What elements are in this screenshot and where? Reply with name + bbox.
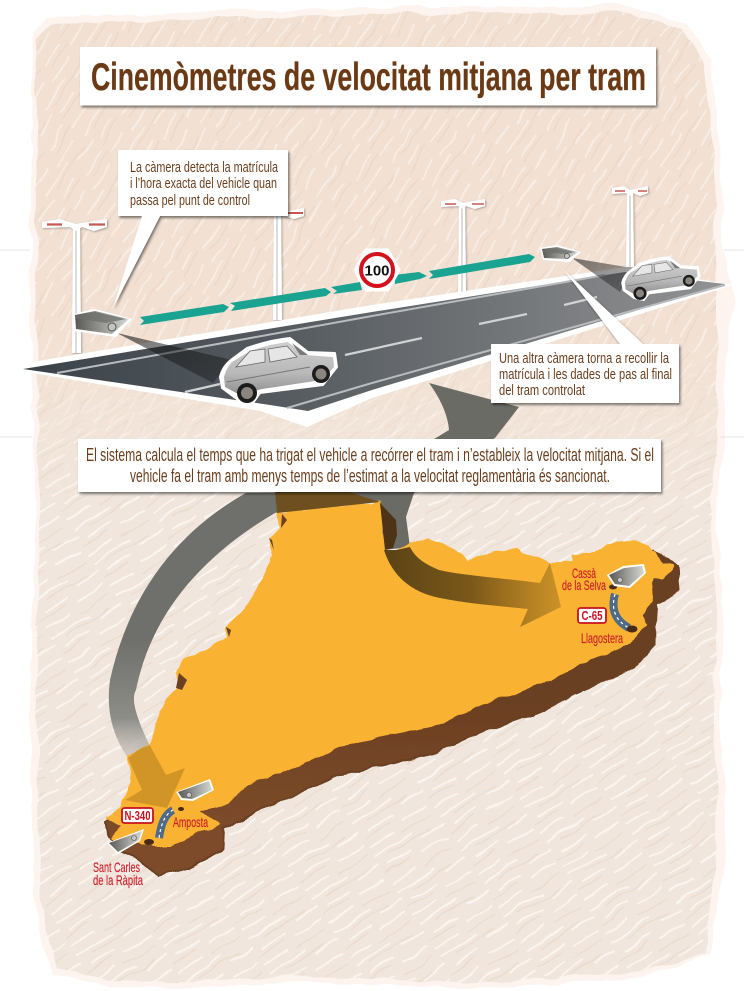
road white border — [8, 267, 733, 427]
camera 2 — [540, 245, 581, 262]
callout: first camera — [113, 150, 288, 308]
lamp post 2 — [273, 208, 304, 320]
arrow over map: south — [125, 742, 185, 808]
place labels: de la Ràpita — [93, 872, 143, 888]
camera light cone 2 — [572, 258, 632, 292]
place labels: Sant Carles — [93, 859, 140, 875]
lamp post 4 — [612, 186, 648, 267]
place labels: Llagostera — [581, 630, 623, 646]
map camera: Cassà — [607, 564, 646, 588]
callout: first camera: La càmera detecta la matrícula — [130, 159, 278, 176]
map notch wall — [380, 503, 397, 550]
car wheels — [237, 365, 330, 403]
camera light cone 1 — [117, 333, 232, 383]
map camera: Amposta — [176, 779, 214, 801]
lamp post 1 — [42, 219, 107, 353]
map side wall — [106, 550, 680, 875]
arrow: grey band from road to east of map — [346, 383, 519, 550]
speed limit sign: 100 — [364, 262, 390, 280]
car windows — [236, 346, 297, 367]
road lane lines — [57, 275, 725, 408]
west coast wall bits — [176, 514, 287, 690]
road asphalt — [23, 272, 725, 411]
camera 1 — [73, 309, 132, 337]
car body — [224, 342, 334, 395]
callout: second camera — [491, 270, 679, 403]
green speed arrow — [140, 254, 535, 325]
road centre dashes — [185, 297, 597, 392]
road on map: C-65 — [613, 594, 629, 628]
road label N-340: N-340 — [124, 809, 151, 823]
callout: first camera: passa pel punt de control — [130, 192, 250, 209]
road label C-65: C-65 — [582, 609, 603, 623]
text box: system explanation — [78, 439, 661, 492]
map top wall under panel — [275, 492, 380, 513]
car 1 in foreground — [220, 338, 337, 403]
place labels — [93, 565, 623, 888]
map top surface — [107, 503, 673, 845]
arrow over map: east — [384, 547, 561, 627]
callout: second camera: del tram controlat — [499, 382, 586, 399]
map camera: Sant Carles — [107, 829, 144, 854]
speed limit sign — [355, 250, 399, 290]
arrow: grey curved band from panel to south of map — [109, 492, 349, 758]
place labels: Cassà — [572, 565, 596, 581]
road — [8, 267, 733, 427]
callout: second camera: Una altra càmera torna a recollir la — [499, 350, 669, 367]
road on map: N-340 — [159, 810, 173, 838]
car white outline — [220, 338, 337, 403]
car windshield — [292, 343, 308, 355]
map of Catalonia — [106, 492, 680, 875]
place labels: de la Selva — [562, 577, 606, 593]
car waist line — [227, 367, 310, 382]
lamp post 3 — [441, 199, 485, 293]
title — [80, 47, 656, 106]
callout: second camera: matrícula i les dades de pas al final — [499, 366, 672, 383]
map points — [144, 584, 638, 845]
callout: first camera: i l’hora exacta del vehicle quan — [130, 175, 277, 192]
car 2 in distance — [622, 257, 699, 300]
place labels: Amposta — [173, 814, 208, 830]
